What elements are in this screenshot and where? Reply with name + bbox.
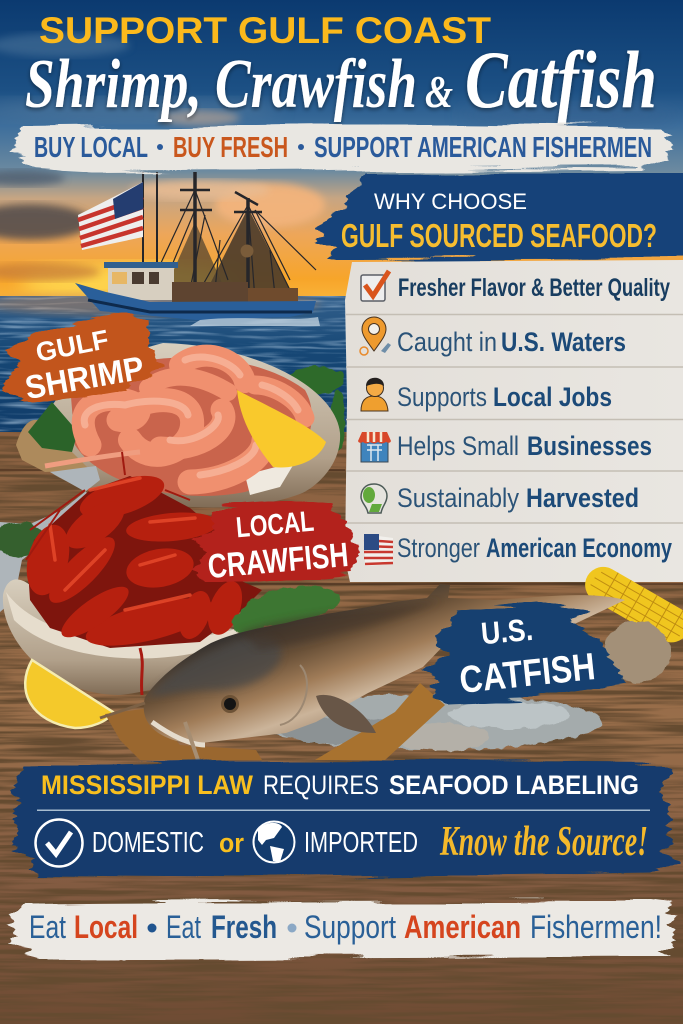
benefit: harvested: Sustainably [397, 483, 519, 513]
oyster [604, 621, 670, 683]
banner: eat local [6, 900, 678, 959]
label: gulf shrimp: GULF [33, 324, 111, 368]
banner: eat local: Local [74, 909, 138, 945]
crawfish bowl [3, 452, 262, 695]
benefit: U.S. waters: U.S. Waters [501, 327, 626, 357]
raffia and leaves [16, 402, 90, 472]
icon: store [358, 432, 391, 462]
benefit: small businesses [397, 431, 652, 461]
label: gulf shrimp [0, 313, 162, 406]
benefit: small businesses: Businesses [527, 431, 652, 461]
corn [579, 560, 683, 649]
wooden plank [315, 683, 445, 760]
label: gulf shrimp: SHRIMP [22, 349, 147, 406]
icon: worker [361, 378, 388, 411]
background: wood table [0, 432, 683, 1024]
benefit: local jobs [397, 382, 612, 412]
catfish [100, 584, 625, 760]
icon: american flag [364, 534, 393, 566]
label: local crawfish: LOCAL [235, 506, 315, 544]
banner: buy local: BUY LOCAL [34, 132, 148, 164]
benefit: U.S. waters: Caught in [397, 327, 497, 357]
heading: support gulf coast: SUPPORT GULF COAST [39, 10, 491, 51]
benefit: harvested: Harvested [526, 483, 639, 513]
herbs left [0, 522, 46, 558]
heading: Shrimp, Crawfish & Catfish: Shrimp, Crawfish [25, 46, 417, 123]
label: local crawfish: CRAWFISH [206, 536, 350, 586]
law heading: REQUIRES [263, 770, 379, 800]
banner: eat local: Eat [166, 909, 201, 945]
benefit: small businesses: Helps Small [397, 431, 519, 461]
banner: buy local [8, 124, 673, 172]
label: imported: IMPORTED [304, 827, 418, 859]
fishing boat with flag [75, 172, 320, 326]
lemon wedge [237, 390, 326, 468]
banner: eat local: Fresh [211, 909, 277, 945]
shrimp bowl [16, 343, 340, 508]
parsley near crawfish [231, 580, 342, 635]
banner: eat local: Support [304, 909, 396, 945]
benefit: harvested [397, 483, 639, 513]
parsley behind shrimp bowl [288, 366, 345, 450]
icon: check circle [36, 820, 82, 866]
label: or: or [219, 828, 244, 858]
lemon slice [25, 660, 113, 728]
label: U.S. catfish: CATFISH [458, 646, 597, 702]
benefit: local jobs: Local Jobs [493, 382, 612, 412]
law heading: MISSISSIPPI LAW [41, 770, 253, 800]
US flag [78, 182, 143, 250]
banner: why choose [314, 172, 683, 259]
benefit: local jobs: Supports [397, 382, 487, 412]
wood board [105, 708, 262, 760]
label: domestic: DOMESTIC [92, 827, 204, 859]
background: sky [0, 0, 683, 303]
banner: Mississippi seafood labeling law [10, 760, 678, 877]
icon: sustainable globe [361, 484, 387, 513]
foil and ice [0, 466, 100, 612]
label: U.S. catfish [423, 602, 625, 703]
banner: eat local: American [404, 909, 521, 945]
banner: buy local: BUY FRESH [173, 132, 288, 164]
icon: globe [254, 822, 294, 862]
banner: why choose: WHY CHOOSE [374, 189, 527, 214]
benefit: economy: Stronger [397, 533, 480, 563]
heading: Shrimp, Crawfish & Catfish [25, 34, 657, 125]
benefit: economy [397, 533, 672, 563]
law heading [41, 770, 639, 800]
benefit: U.S. waters [397, 327, 626, 357]
icon: check box [361, 271, 389, 301]
panel: benefits list [345, 260, 683, 582]
label: U.S. catfish: U.S. [480, 612, 534, 651]
heading: Shrimp, Crawfish & Catfish: & [425, 66, 453, 117]
law heading: SEAFOOD LABELING [389, 770, 639, 800]
banner: eat local: Eat [29, 909, 66, 945]
label: local crawfish [192, 500, 360, 586]
icon: map pin [360, 317, 391, 355]
ice [258, 694, 602, 751]
background: sea [0, 292, 350, 436]
